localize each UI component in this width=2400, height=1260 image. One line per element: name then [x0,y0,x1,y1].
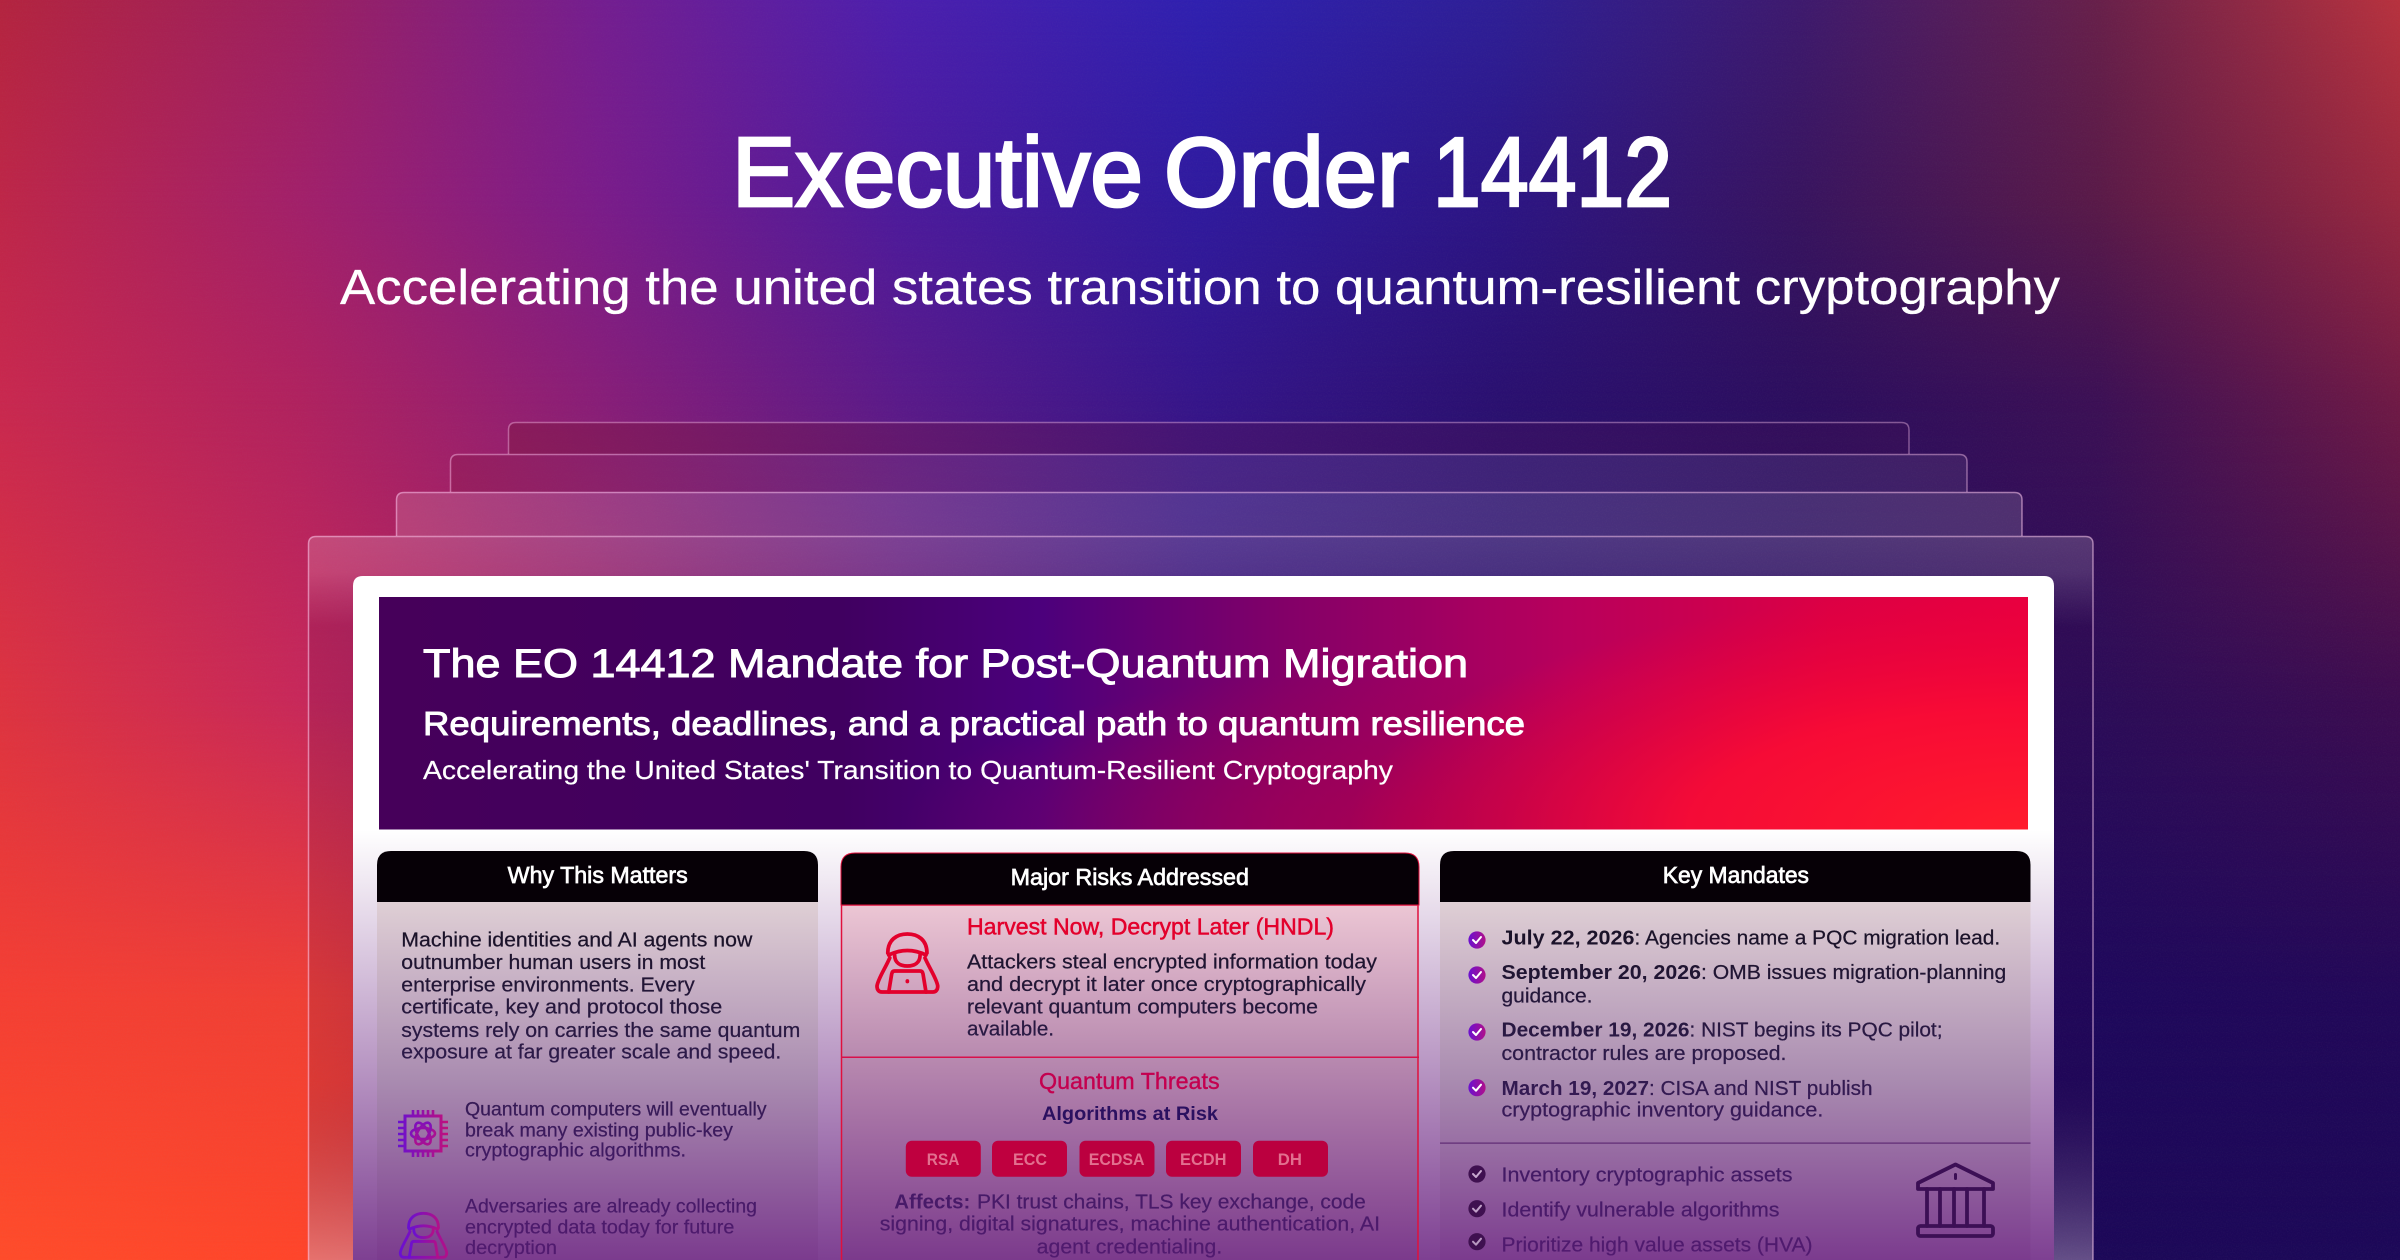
mandate: July 22 [1468,927,2000,949]
action checklist [1468,1165,1812,1257]
mandate: September 20: guidance. [1502,985,1592,1007]
algorithm chips: DH [1278,1150,1302,1169]
adversary text: decryption [465,1238,557,1259]
algorithm chips: ECDH [1180,1150,1226,1169]
chip text: cryptographic algorithms. [465,1141,686,1162]
HNDL description: Attackers steal encrypted information today [967,952,1377,974]
quantum threats heading: Quantum Threats [1039,1068,1220,1094]
panel: why this matters [377,851,818,1260]
mandate: March 19: March 19, 2027 [1502,1078,1649,1100]
HNDL description: and decrypt it later once cryptographically [967,974,1366,996]
panel body [1440,902,2030,1260]
risk divider [841,1056,1419,1058]
HNDL description: relevant quantum computers become [967,997,1318,1019]
action: inventory: Inventory cryptographic assets [1502,1165,1792,1187]
mandate: September 20: September 20, 2026 [1502,962,1701,984]
mandate: December 19: December 19, 2026 [1502,1020,1690,1042]
action: identify: Identify vulnerable algorithms [1502,1200,1780,1222]
banner tagline: Accelerating the United States' Transition to Quantum-Resilient Cryptography [423,755,1393,785]
panel heading: Major Risks Addressed [1011,864,1249,890]
mandate divider [1440,1142,2030,1144]
intro paragraph: systems rely on carries the same quantum [401,1020,800,1042]
mandate: December 19: contractor rules are proposed. [1502,1043,1786,1065]
mandate: March 19 [1468,1078,1872,1122]
HNDL heading: Harvest Now, Decrypt Later (HNDL) [967,914,1334,940]
stacked back card 3 [396,492,2022,536]
icon: hooded adversary [400,1213,447,1257]
algorithm chips: ECDSA [1089,1150,1145,1169]
mandate deadlines list [1468,927,2006,1122]
affected systems text: PKI trust chains, TLS key exchange, code [977,1192,1366,1214]
algorithms at risk label: Algorithms at Risk [1042,1103,1218,1125]
page title [732,117,1672,227]
algorithm chips: RSA [927,1150,959,1169]
mandate: July 22: July 22, 2026 [1502,927,1634,949]
mandate: December 19 [1468,1020,1942,1065]
banner subtitle: Requirements, deadlines, and a practical path to quantum resilience [423,705,1525,742]
intro paragraph: exposure at far greater scale and speed. [401,1042,781,1064]
HNDL icon [877,934,938,992]
sheet background [353,576,2054,1260]
infographic sheet [353,576,2054,1260]
mandate: September 20 [1468,962,2006,1007]
icon: quantum chip [398,1110,448,1157]
adversary text [465,1197,757,1259]
panel header [841,853,1419,905]
algorithm chips: ECC [1013,1150,1047,1169]
affected systems text: Affects: [894,1192,970,1214]
affected systems text: agent credentialing. [1037,1236,1222,1258]
panel: major risks addressed [841,853,1419,1260]
intro paragraph: enterprise environments. Every [401,975,695,997]
intro paragraph: certificate, key and protocol those [401,997,722,1019]
HNDL description [967,952,1377,1041]
chip text [465,1099,767,1162]
stacked back card 2 [450,454,1967,492]
mandate: March 19: : CISA and NIST publish [1649,1078,1872,1100]
intro paragraph [401,930,800,1064]
front glass card [308,536,2093,1260]
adversary text: Adversaries are already collecting [465,1197,757,1218]
mandate: July 22: : Agencies name a PQC migration lead. [1634,927,2000,949]
icon: government building [1918,1164,1993,1236]
algorithm chips [906,1141,1328,1177]
banner title: The EO 14412 Mandate for Post-Quantum Migration [423,642,1468,686]
adversary text: encrypted data today for future [465,1218,734,1239]
action: prioritize: Prioritize high value assets (HVA) [1502,1235,1812,1257]
panel body [842,905,1418,1260]
panel heading: Key Mandates [1663,862,1809,888]
page subtitle: Accelerating the united states transition to quantum-resilient cryptography [340,261,2061,315]
panel body [377,902,818,1260]
mandate: December 19: : NIST begins its PQC pilot; [1690,1020,1942,1042]
page title: Executive [732,117,1143,227]
page title: Order [1164,117,1409,227]
HNDL description: available. [967,1019,1054,1041]
intro paragraph: Machine identities and AI agents now [401,930,753,952]
mandate: September 20: : OMB issues migration-planning [1701,962,2006,984]
affected systems text [880,1192,1380,1258]
mandate: March 19: cryptographic inventory guidance. [1502,1100,1823,1122]
chip text: Quantum computers will eventually [465,1099,767,1120]
panel heading: Why This Matters [508,862,688,888]
panel header [1440,851,2030,902]
intro paragraph: outnumber human users in most [401,952,706,974]
banner background [379,597,2028,830]
panel header [377,851,818,902]
banner [379,597,2028,830]
page title: 14412 [1433,117,1672,227]
chip text: break many existing public-key [465,1120,734,1141]
panel: key mandates [1440,851,2030,1260]
stacked back card 1 [508,422,1909,454]
affected systems text: signing, digital signatures, machine authentication, AI [880,1214,1380,1236]
